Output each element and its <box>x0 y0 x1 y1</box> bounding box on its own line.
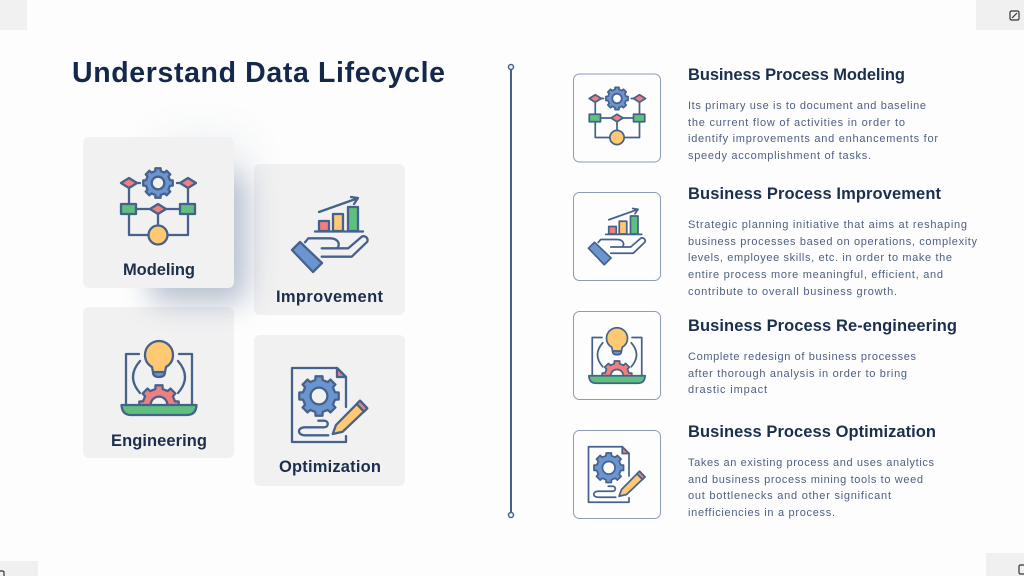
description: improvement: contribute to overall business growth. <box>688 286 897 298</box>
icon box: modeling <box>574 74 660 162</box>
description: improvement: levels, employee skills, etc. in order to make the <box>688 252 952 264</box>
icon box: improvement <box>574 192 660 280</box>
description: optimization <box>688 457 934 519</box>
label: optimization: Optimization <box>279 458 381 476</box>
panel: business process re-engineering <box>574 312 957 400</box>
description: modeling: the current flow of activities in order to <box>688 117 905 129</box>
panel: business process modeling <box>574 66 938 162</box>
heading: improvement: Business Process Improvement <box>688 185 942 203</box>
panel: engineering card <box>83 307 234 458</box>
description: improvement: entire process more meaningful, efficient, and <box>688 269 943 281</box>
panel: optimization card <box>254 335 405 486</box>
description: improvement: Strategic planning initiative that aims at reshaping <box>688 219 967 231</box>
corner tab: bottom left <box>0 561 38 576</box>
panel: modeling card <box>83 137 234 288</box>
panel: improvement card <box>254 164 405 315</box>
description: optimization: and business process mining tools to weed <box>688 474 923 486</box>
icon box: optimization <box>574 430 660 518</box>
label: modeling: Modeling <box>123 261 195 279</box>
heading: optimization: Business Process Optimization <box>688 423 936 441</box>
description: optimization: inefficiencies in a process. <box>688 507 835 519</box>
description: optimization: out bottlenecks and other significant <box>688 490 891 502</box>
label: improvement: Improvement <box>276 288 384 306</box>
corner tab: top right <box>976 0 1024 30</box>
icon: bulb over laptop <box>122 341 196 425</box>
description: modeling: identify improvements and enhancements for <box>688 133 938 145</box>
description: improvement: business processes based on operations, complexity <box>688 236 978 248</box>
corner tab: top left <box>0 0 27 30</box>
description: modeling: Its primary use is to document and baseline <box>688 100 926 112</box>
description: improvement <box>688 219 978 298</box>
description: re-engineering: after thorough analysis in order to bring <box>688 368 907 380</box>
label: engineering: Engineering <box>111 432 207 450</box>
heading: modeling: Business Process Modeling <box>688 66 905 84</box>
description: modeling <box>688 100 938 162</box>
icon: process flow <box>121 168 196 244</box>
panel: business process improvement <box>574 185 978 298</box>
heading: re-engineering: Business Process Re-engineering <box>688 317 957 335</box>
title: Understand Data Lifecycle <box>72 57 445 89</box>
timeline divider <box>508 64 514 518</box>
icon box: engineering <box>574 312 660 400</box>
card shadow <box>150 140 246 303</box>
panel: business process optimization <box>574 423 936 519</box>
description: re-engineering: drastic impact <box>688 384 767 396</box>
icon: hand with chart <box>292 197 368 272</box>
description: re-engineering: Complete redesign of business processes <box>688 351 916 363</box>
corner tab: bottom right <box>986 553 1024 576</box>
description: optimization: Takes an existing process and uses analytics <box>688 457 934 469</box>
description: modeling: speedy accomplishment of tasks. <box>688 150 871 162</box>
icon: document with gear and pencil <box>292 368 367 442</box>
description: re-engineering <box>688 351 916 396</box>
